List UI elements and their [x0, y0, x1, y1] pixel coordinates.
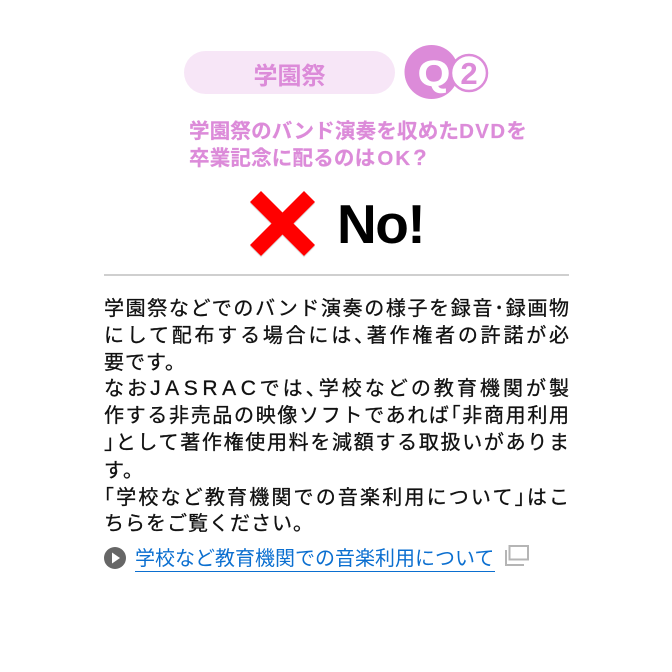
- category pill: 学園祭: 学園祭: [254, 56, 326, 91]
- question number badge Q2: [404, 45, 488, 99]
- divider: [104, 274, 569, 276]
- question number badge Q2: Q: [418, 54, 450, 94]
- answer: No!: No!: [337, 193, 424, 255]
- answer body text: [104, 292, 569, 536]
- question text: [189, 114, 527, 171]
- icon: play bullet: [104, 547, 126, 569]
- answer body text: す。: [104, 454, 144, 483]
- question text: 卒業記念に配るのはOK?: [189, 141, 428, 171]
- icon: red cross: [250, 191, 315, 258]
- answer body text: 要です。: [104, 346, 186, 375]
- answer body text: 」として著作権使用料を減額する取扱いがありま: [104, 426, 569, 455]
- answer body text: 学園祭などでのバンド演奏の様子を録音･録画物: [104, 292, 569, 321]
- question text: 学園祭のバンド演奏を収めたDVDを: [189, 114, 527, 144]
- category pill: 学園祭: [184, 51, 395, 94]
- link: 学校など教育機関での音楽利用について: [135, 542, 494, 571]
- answer body text: ちらをご覧ください。: [104, 507, 314, 536]
- answer body text: 「学校など教育機関での音楽利用について」はこ: [104, 481, 569, 510]
- answer body text: なおJASRACでは、学校などの教育機関が製: [104, 372, 569, 401]
- answer body text: 作する非売品の映像ソフトであれば「非商用利用: [104, 399, 569, 428]
- question number badge Q2: 2: [460, 56, 478, 91]
- answer body text: にして配布する場合には、著作権者の許諾が必: [104, 319, 569, 348]
- icon: external window: [505, 545, 529, 566]
